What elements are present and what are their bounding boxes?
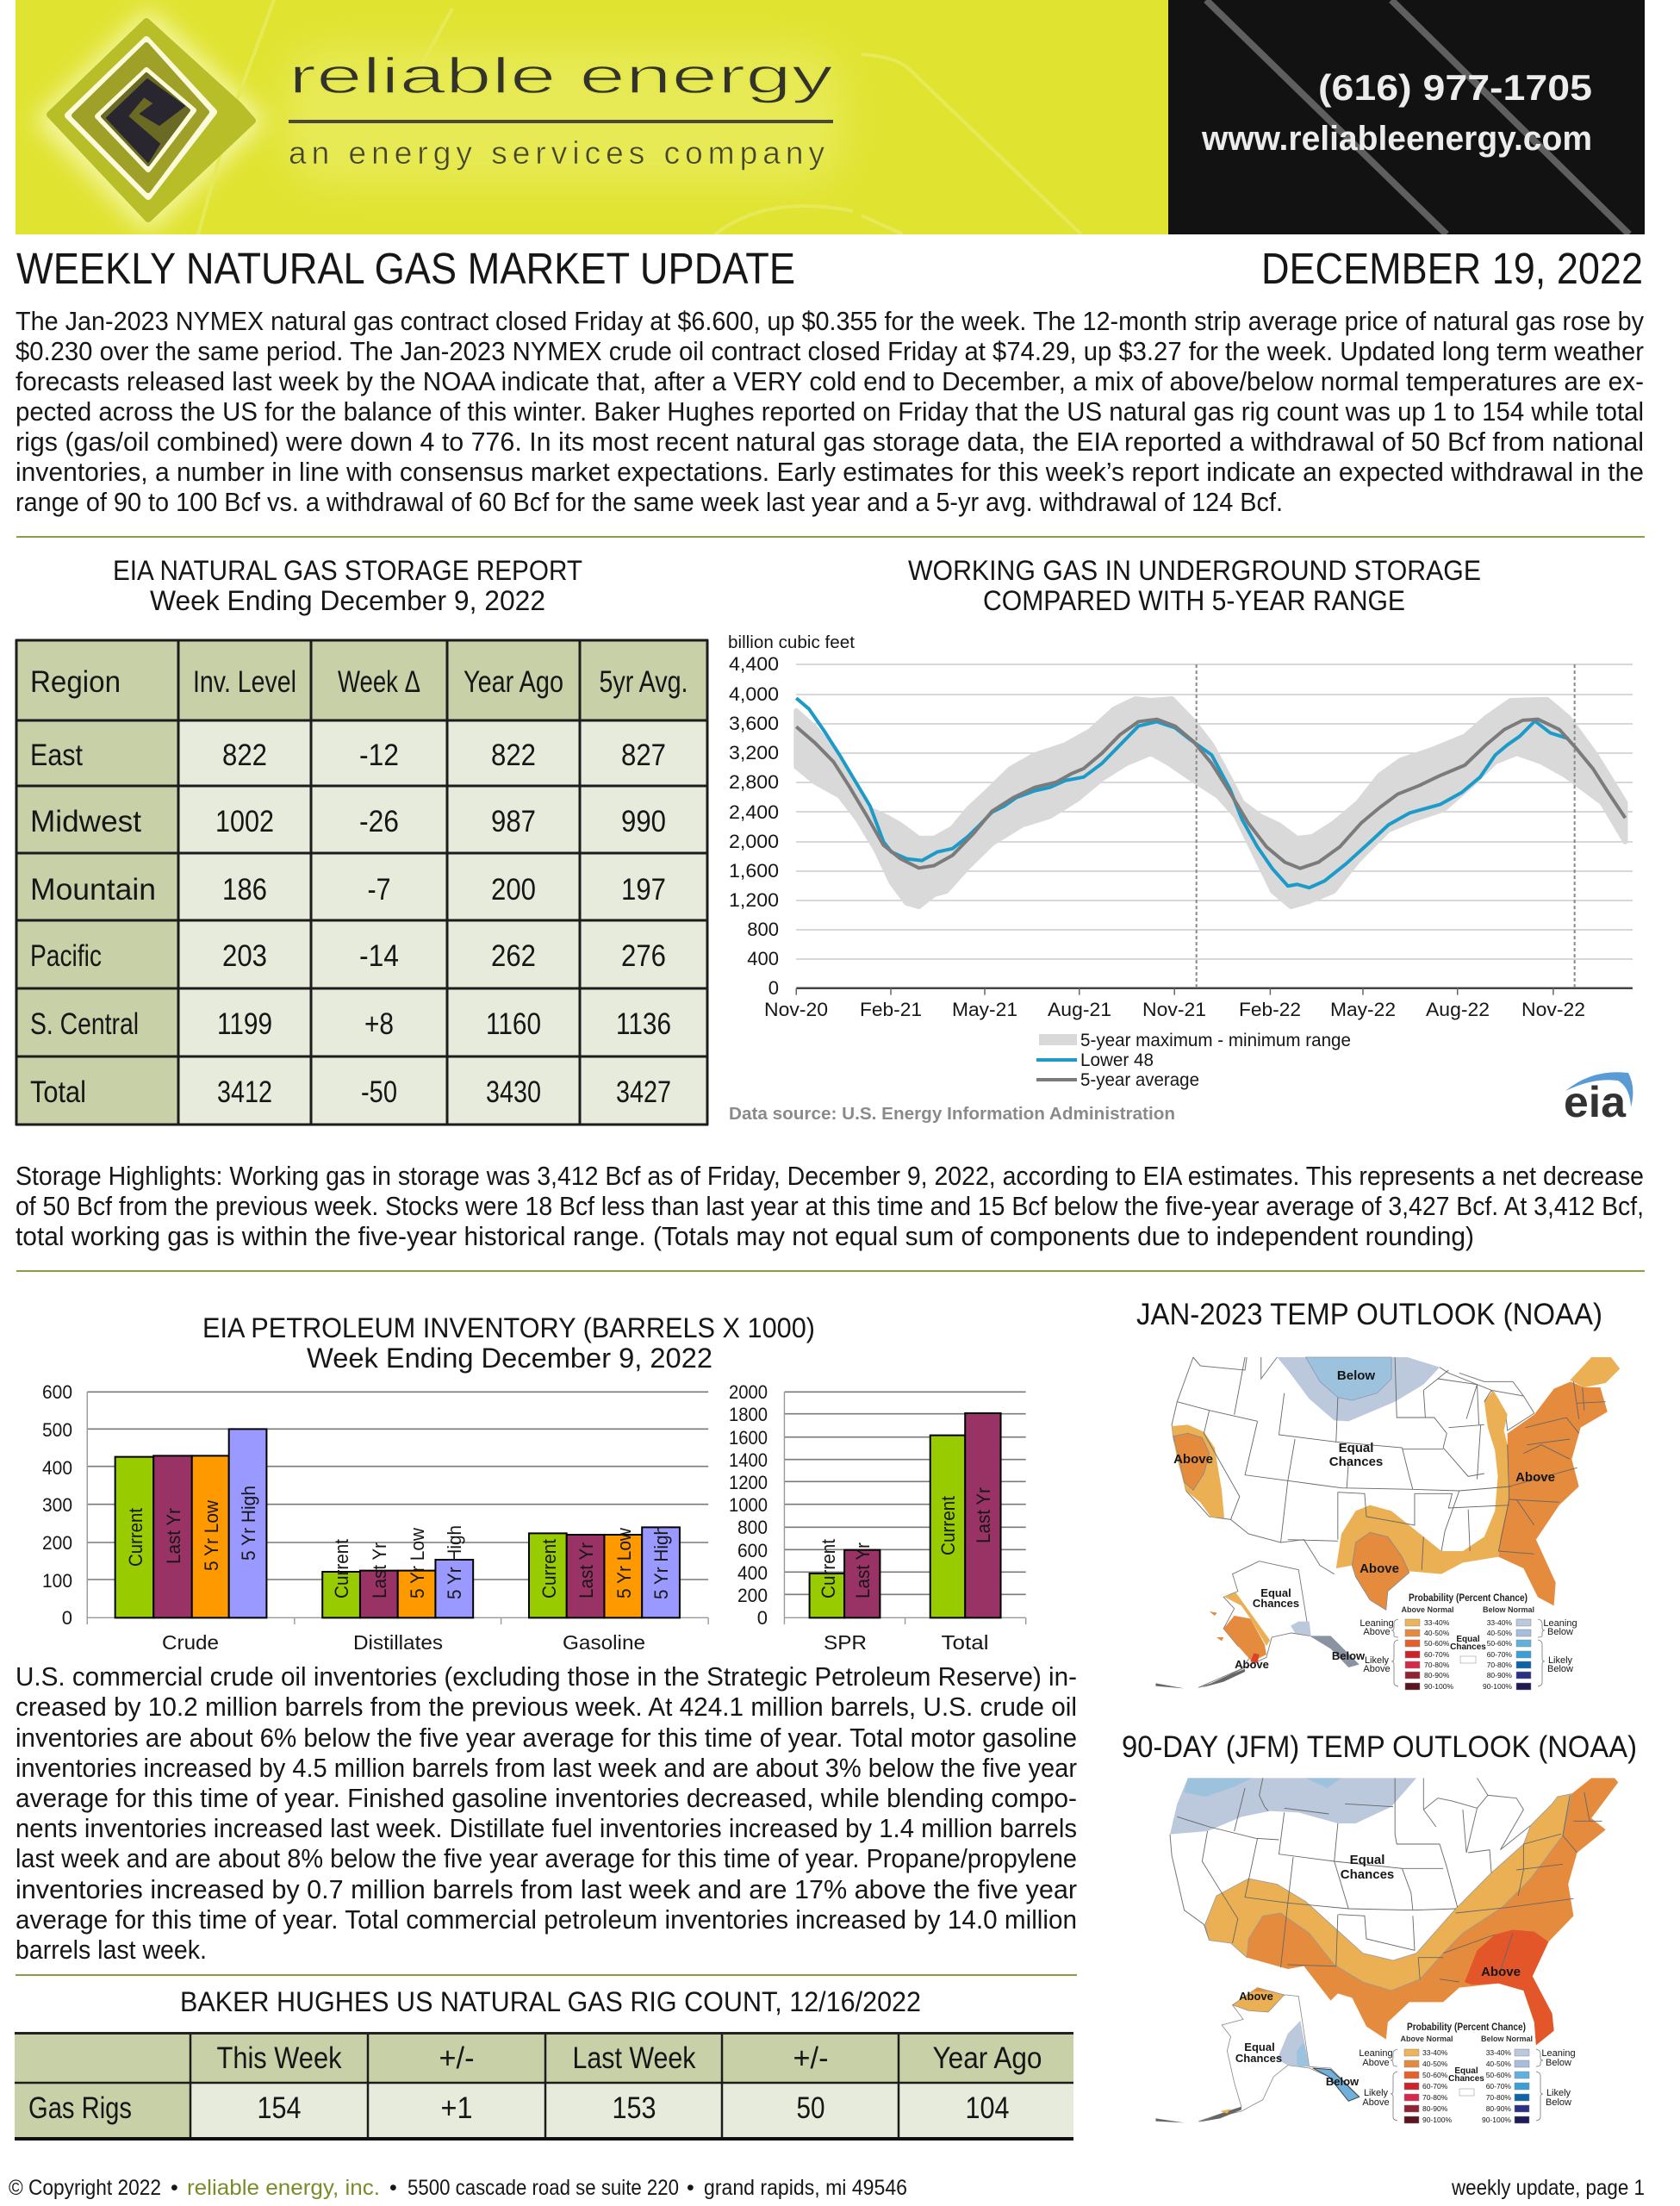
heading: storage report: Week Ending December 9, 2022 <box>150 585 545 616</box>
table header row <box>30 665 688 699</box>
Alaska <box>1198 1561 1310 1687</box>
map legend: Equal <box>1454 2066 1478 2076</box>
intro text block: rigs (gas/oil combined) were down 4 to 776. In its most recent natural gas storage data, the EIA reported a withdrawal of 50 Bcf from national <box>16 427 1644 457</box>
map legend: Likely <box>1365 1655 1390 1666</box>
map legend: 90-100% <box>1422 2116 1452 2124</box>
right axis labels: 1000 <box>729 1494 768 1516</box>
map labels: Below <box>1332 1649 1366 1662</box>
heading: petroleum inventory: Week Ending December 9, 2022 <box>307 1343 712 1374</box>
map legend: Leaning <box>1543 1618 1577 1629</box>
icon: eia logo: eia <box>1564 1078 1627 1126</box>
right axis labels: 1400 <box>729 1449 768 1471</box>
intro text block: range of 90 to 100 Bcf vs. a withdrawal of 60 Bcf for the same week last year and a 5-yr avg. withdrawal of 124 Bcf. <box>16 487 1283 517</box>
bar labels: Last Yr <box>852 1542 874 1598</box>
map legend: 80-90% <box>1424 1671 1450 1679</box>
chart: x-axis labels: Feb-22 <box>1239 999 1301 1020</box>
intro text block <box>16 306 1644 517</box>
row: Mountain: -7 <box>367 873 391 907</box>
above, east <box>1498 1381 1608 1605</box>
website: www.reliableenergy.com <box>1201 120 1592 158</box>
bar labels: Current <box>937 1496 959 1555</box>
line chart: working gas in storage <box>728 633 1633 1126</box>
left axis labels: 200 <box>42 1532 72 1554</box>
petroleum text block: nents inventories increased last week. Distillate fuel inventories increased by 1.4 million barrels <box>16 1813 1077 1843</box>
heading: storage report <box>113 555 582 616</box>
row: Total: -50 <box>361 1075 397 1109</box>
row: Pacific: -14 <box>359 939 399 973</box>
bar labels: Last Yr <box>576 1542 597 1598</box>
map legend: Leaning <box>1359 2048 1393 2059</box>
row: S. Central: 1160 <box>486 1007 541 1041</box>
footer: copyright and address: reliable energy, inc. <box>187 2176 380 2200</box>
left axis labels: 600 <box>42 1381 72 1403</box>
map legend: 90-100% <box>1482 2116 1511 2124</box>
chart: y-axis labels: 2,800 <box>729 771 779 793</box>
petroleum text block: inventories increased by 4.5 million barrels from last week and are about 3% below the five year <box>16 1753 1077 1783</box>
category labels: Gasoline <box>563 1631 645 1654</box>
row: East <box>30 738 666 772</box>
map legend: Probability (Percent Chance) <box>1409 1592 1528 1604</box>
heading: petroleum inventory: EIA PETROLEUM INVENTORY (BARRELS X 1000) <box>202 1312 815 1343</box>
leaning below <box>1170 1778 1416 1835</box>
row: Pacific: Pacific <box>30 939 102 973</box>
category labels: Crude <box>162 1631 219 1654</box>
map legend: 70-80% <box>1422 2093 1448 2102</box>
map labels: Equal <box>1260 1586 1291 1599</box>
row: S. Central <box>30 1007 671 1041</box>
footer: copyright and address <box>9 2176 907 2200</box>
map legend: 60-70% <box>1422 2082 1448 2091</box>
contact panel <box>1168 0 1645 234</box>
heading: petroleum inventory <box>202 1312 815 1374</box>
category labels: Distillates <box>353 1631 443 1654</box>
rig table header: +/- <box>439 2041 474 2075</box>
map shapes <box>1155 1778 1618 2122</box>
below, northern plains <box>1306 1357 1391 1400</box>
table header row: Week Δ <box>338 665 420 699</box>
chart: x-axis labels: Nov-21 <box>1142 999 1206 1020</box>
bar labels: Current <box>125 1508 146 1567</box>
header banner <box>16 0 1645 234</box>
map legend: Above Normal <box>1401 1605 1454 1614</box>
map labels: Equal <box>1244 2041 1275 2053</box>
map legend: 33-40% <box>1487 1618 1512 1627</box>
petroleum text block: inventories increased by 0.7 million barrels from last week and are 17% above the five year <box>16 1874 1077 1904</box>
heading: underground storage chart <box>908 555 1481 616</box>
leaning below <box>1277 1357 1440 1421</box>
map labels: Above <box>1515 1470 1555 1485</box>
row: Mountain: 186 <box>222 873 267 907</box>
row: Midwest <box>30 805 666 838</box>
map labels: Above <box>1173 1452 1213 1467</box>
below, northwest <box>1185 1778 1252 1797</box>
map legend: Chances <box>1450 1642 1486 1652</box>
map legend: Below <box>1546 2097 1571 2108</box>
table header row: Inv. Level <box>193 665 296 699</box>
map legend: 40-50% <box>1424 1629 1450 1637</box>
chart: y-axis labels <box>729 653 779 999</box>
left axis labels: 400 <box>42 1457 72 1479</box>
chart: range and series <box>796 664 1633 995</box>
footer: copyright and address: grand rapids, mi 49546 <box>704 2176 907 2200</box>
above, southeast core <box>1465 1929 1554 2045</box>
footer: copyright and address: 5500 cascade road se suite 220 <box>408 2176 679 2200</box>
chart: y-axis labels: 4,000 <box>729 683 779 705</box>
row: Total: 3430 <box>486 1075 541 1109</box>
rig table header: Last Week <box>572 2041 696 2075</box>
bar labels: 5 Yr High <box>444 1525 465 1599</box>
chart: y-axis labels: 400 <box>747 948 779 969</box>
map labels <box>1235 1853 1521 2088</box>
heading: January outlook: JAN-2023 TEMP OUTLOOK (NOAA) <box>1136 1298 1602 1331</box>
footer: copyright and address: © Copyright 2022 <box>9 2176 161 2200</box>
logo: divider rule <box>289 120 833 123</box>
row: Midwest: 1002 <box>215 805 274 838</box>
row: S. Central: S. Central <box>30 1007 139 1041</box>
chart: x-axis labels: Aug-22 <box>1426 999 1490 1020</box>
petroleum text block <box>16 1661 1077 1965</box>
row: Mountain: 197 <box>621 873 666 907</box>
map legend: Probability (Percent Chance) <box>1407 2021 1526 2033</box>
map legend: 33-40% <box>1422 2048 1448 2057</box>
state lines <box>1177 1778 1602 1982</box>
row: Mountain: Mountain <box>30 873 156 907</box>
row: Pacific: 262 <box>491 939 536 973</box>
map: 90-day temperature outlook <box>1155 1778 1618 2124</box>
rig table row: 104 <box>965 2091 1010 2125</box>
footer: copyright and address: • <box>687 2176 694 2200</box>
row: Total: Total <box>30 1075 86 1109</box>
map legend: Below <box>1546 2058 1571 2068</box>
footer: page number: weekly update, page 1 <box>1451 2176 1645 2200</box>
table header row: Year Ago <box>464 665 563 699</box>
map legend: 60-70% <box>1487 1650 1512 1659</box>
rig table row <box>28 2091 1010 2125</box>
map legend: Below Normal <box>1481 2035 1533 2043</box>
map legend: 70-80% <box>1487 1661 1512 1669</box>
above, west <box>1173 1433 1210 1490</box>
petroleum text block: last week and are about 8% below the five year average for this time of year. Propane/propylene <box>16 1843 1077 1873</box>
map: January temperature outlook <box>1155 1357 1620 1691</box>
storage highlights text: total working gas is within the five-year historical range. (Totals may not equal sum of components due to independent rounding) <box>16 1221 1474 1251</box>
bar labels: Last Yr <box>369 1542 390 1598</box>
chart: y-axis labels: 800 <box>747 919 779 940</box>
bar labels: 5 Yr Low <box>407 1528 428 1598</box>
rig table row: 50 <box>796 2091 825 2125</box>
map legend: 60-70% <box>1424 1650 1450 1659</box>
chart: x-axis labels: Feb-21 <box>860 999 922 1020</box>
map legend: Likely <box>1546 2088 1571 2098</box>
bar labels: Current <box>331 1539 352 1598</box>
map legend: 90-100% <box>1483 1682 1512 1691</box>
heading: underground storage chart: COMPARED WITH 5-YEAR RANGE <box>983 585 1405 616</box>
bar chart: petroleum inventory <box>42 1381 1026 1654</box>
leaning above, west <box>1172 1424 1224 1518</box>
bar labels: Last Yr <box>973 1487 994 1543</box>
chart: y-axis labels: 3,200 <box>729 742 779 763</box>
chart: x-axis labels: Nov-20 <box>764 999 828 1020</box>
map legend: 80-90% <box>1486 2104 1511 2113</box>
map legend: 33-40% <box>1424 1618 1450 1627</box>
map labels <box>1173 1368 1555 1671</box>
map labels: Chances <box>1235 2052 1282 2065</box>
rig count table <box>15 2032 1073 2141</box>
table header row: Region <box>30 665 121 699</box>
footer: copyright and address: • <box>389 2176 397 2200</box>
chart: data source: Data source: U.S. Energy Information Administration <box>729 1105 1175 1124</box>
bar labels: Last Yr <box>163 1508 184 1564</box>
map legend: 80-90% <box>1487 1671 1512 1679</box>
rig table header: This Week <box>217 2041 342 2075</box>
chart: x-axis labels <box>764 999 1585 1020</box>
map legend: Above Normal <box>1400 2035 1453 2043</box>
chart frame and bars <box>87 1392 1026 1624</box>
row: Pacific <box>30 939 666 973</box>
left axis labels: 500 <box>42 1419 72 1441</box>
petroleum text block: barrels last week. <box>16 1935 207 1965</box>
chart: y-axis title: billion cubic feet <box>728 633 855 652</box>
banner: yellow logo panel <box>16 0 1168 234</box>
rig table row: 154 <box>257 2091 302 2125</box>
map legend: Above <box>1362 2058 1390 2068</box>
row: Mountain: 200 <box>491 873 536 907</box>
rig table row: 153 <box>612 2091 656 2125</box>
map labels: Above <box>1235 1658 1269 1671</box>
bar labels <box>125 1486 994 1599</box>
map labels: Chances <box>1329 1455 1383 1469</box>
row: Pacific: 276 <box>621 939 666 973</box>
5-year range band <box>796 699 1625 907</box>
map legend: Above <box>1363 1627 1391 1637</box>
map labels: Above <box>1360 1561 1399 1576</box>
category labels: SPR <box>824 1631 867 1654</box>
map legend: Leaning <box>1541 2048 1576 2059</box>
row: Total: 3412 <box>217 1075 272 1109</box>
row: S. Central: 1136 <box>616 1007 671 1041</box>
chart: legend: 5-year maximum - minimum range <box>1080 1031 1351 1050</box>
map labels: Equal <box>1339 1441 1373 1455</box>
right axis labels: 2000 <box>729 1381 768 1403</box>
map legend: Leaning <box>1360 1618 1394 1629</box>
leaning above, south and midwest <box>1336 1390 1509 1583</box>
bar labels: 5 Yr High <box>238 1486 259 1561</box>
row: Mountain <box>30 873 666 907</box>
map legend: Above <box>1362 2097 1390 2108</box>
map legend: 80-90% <box>1422 2104 1448 2113</box>
row: East: East <box>30 738 83 772</box>
left axis labels: 100 <box>42 1570 72 1592</box>
map legend: Likely <box>1548 1655 1573 1666</box>
bar labels: Current <box>818 1539 839 1598</box>
map legend: Below Normal <box>1483 1605 1534 1614</box>
chart: legend: 5-year average <box>1080 1070 1199 1090</box>
row: S. Central: 1199 <box>217 1007 272 1041</box>
map legend: 33-40% <box>1486 2048 1511 2057</box>
Alaska <box>1198 1995 1360 2122</box>
petroleum text block: U.S. commercial crude oil inventories (excluding those in the Strategic Petroleum Reserve) in- <box>16 1661 1077 1692</box>
right axis labels: 400 <box>737 1562 768 1584</box>
bar labels: Current <box>538 1539 560 1598</box>
map legend: 60-70% <box>1486 2082 1511 2091</box>
chart: y-axis labels: 2,000 <box>729 831 779 852</box>
rig table header <box>217 2041 1042 2075</box>
right axis labels <box>729 1381 768 1629</box>
map labels: Chances <box>1253 1597 1299 1610</box>
category labels <box>162 1631 989 1654</box>
left axis labels <box>42 1381 72 1629</box>
heading: storage report: EIA NATURAL GAS STORAGE REPORT <box>113 555 582 586</box>
row: Total <box>30 1075 671 1109</box>
map labels: Equal <box>1350 1853 1384 1867</box>
row: Midwest: 987 <box>491 805 536 838</box>
left axis labels: 0 <box>62 1607 72 1629</box>
map labels: Above <box>1481 1965 1521 1979</box>
phone number: (616) 977-1705 <box>1318 67 1592 108</box>
rig table row: +1 <box>441 2091 472 2125</box>
heading: underground storage chart: WORKING GAS IN UNDERGROUND STORAGE <box>908 555 1481 586</box>
chart: x-axis labels: Nov-22 <box>1521 999 1585 1020</box>
map legend: 70-80% <box>1424 1661 1450 1669</box>
chart: y-axis labels: 1,200 <box>729 889 779 911</box>
right axis labels: 200 <box>737 1585 768 1606</box>
5-year average line <box>796 720 1625 869</box>
map legend <box>1359 2021 1576 2124</box>
chart: legend: Lower 48 <box>1080 1050 1154 1070</box>
row: Total: 3427 <box>616 1075 671 1109</box>
map legend: Equal <box>1456 1635 1480 1644</box>
bar labels: 5 Yr Low <box>613 1528 635 1598</box>
row: S. Central: +8 <box>364 1007 394 1041</box>
map labels: Above <box>1239 1990 1273 2003</box>
row: Midwest: -26 <box>359 805 399 838</box>
logo: tagline: an energy services company <box>289 135 825 171</box>
map legend: Above <box>1363 1664 1391 1674</box>
map legend <box>1360 1592 1577 1691</box>
logo: company name: reliable energy <box>289 48 833 104</box>
chart: x-axis labels: Aug-21 <box>1048 999 1111 1020</box>
rig table row: Gas Rigs <box>28 2091 132 2125</box>
right axis labels: 1800 <box>729 1404 768 1425</box>
table header row: 5yr Avg. <box>600 665 688 699</box>
right axis labels: 1600 <box>729 1427 768 1449</box>
state lines <box>1177 1357 1606 1570</box>
storage table <box>16 639 708 1125</box>
map legend: Below <box>1547 1627 1573 1637</box>
rig table header: Year Ago <box>932 2041 1042 2075</box>
heading: rig count: BAKER HUGHES US NATURAL GAS RIG COUNT, 12/16/2022 <box>180 1986 921 2017</box>
intro text block: forecasts released last week by the NOAA indicate that, after a VERY cold end to December, a mix of above/below normal temperatures are ex- <box>16 366 1644 396</box>
petroleum text block: average for this time of year. Finished gasoline inventories decreased, while blending compo- <box>16 1783 1077 1813</box>
right axis labels: 1200 <box>729 1472 768 1493</box>
chart: y-axis labels: 1,600 <box>729 860 779 882</box>
above, south and east <box>1247 1778 1618 2045</box>
Lower 48 line <box>796 698 1569 888</box>
map legend: Below <box>1547 1664 1573 1674</box>
map legend: 50-60% <box>1424 1639 1450 1648</box>
heading: 90-day outlook: 90-DAY (JFM) TEMP OUTLOOK (NOAA) <box>1122 1730 1637 1764</box>
petroleum text block: average for this time of year. Total commercial petroleum inventories increased by 14.0 million <box>16 1904 1077 1935</box>
row: Pacific: 203 <box>222 939 267 973</box>
category labels: Total <box>941 1631 989 1654</box>
map legend: 40-50% <box>1486 2060 1511 2068</box>
map legend: 50-60% <box>1486 2071 1511 2079</box>
petroleum text block: inventories are about 6% below the five year average for this time of year. Total motor gasoline <box>16 1723 1077 1753</box>
row: East: 822 <box>491 738 536 772</box>
leaning above, new england <box>1570 1357 1620 1387</box>
row: East: 827 <box>621 738 666 772</box>
map legend: 50-60% <box>1422 2071 1448 2079</box>
logo: diamond mark <box>50 22 252 219</box>
title: WEEKLY NATURAL GAS MARKET UPDATE <box>16 244 795 293</box>
map shapes <box>1155 1357 1620 1688</box>
below, north central <box>1306 1778 1341 1788</box>
map labels: Below <box>1326 2075 1360 2088</box>
right axis labels: 600 <box>737 1540 768 1561</box>
left axis labels: 300 <box>42 1494 72 1516</box>
right axis labels: 0 <box>757 1607 768 1629</box>
rig table header: +/- <box>793 2041 829 2075</box>
row: Midwest: 990 <box>621 805 666 838</box>
footer: copyright and address: • <box>171 2176 178 2200</box>
map labels: Chances <box>1341 1867 1394 1882</box>
map legend: Chances <box>1448 2074 1484 2084</box>
bar labels: 5 Yr High <box>650 1525 672 1599</box>
right axis labels: 800 <box>737 1517 768 1538</box>
map legend: 70-80% <box>1486 2093 1511 2102</box>
chart: y-axis labels: 4,400 <box>729 653 779 675</box>
row: East: 822 <box>222 738 267 772</box>
intro text block: inventories, a number in line with consensus market expectations. Early estimates for this week’s report indicate an expected withdrawal in the <box>16 457 1644 487</box>
map legend: 40-50% <box>1422 2060 1448 2068</box>
storage highlights text <box>16 1161 1644 1251</box>
above, Texas <box>1352 1532 1409 1610</box>
chart: y-axis labels: 3,600 <box>729 713 779 734</box>
chart: x-axis labels: May-21 <box>952 999 1017 1020</box>
row: Midwest: Midwest <box>30 805 141 838</box>
chart: x-axis labels: May-22 <box>1330 999 1396 1020</box>
petroleum text block: creased by 10.2 million barrels from the previous week. At 424.1 million barrels, U.S. crude oil <box>16 1692 1077 1722</box>
map legend: 40-50% <box>1487 1629 1512 1637</box>
map legend: Likely <box>1364 2088 1389 2098</box>
map legend: 90-100% <box>1424 1682 1453 1691</box>
chart: y-axis labels: 0 <box>768 977 779 999</box>
map labels: Below <box>1337 1368 1375 1383</box>
chart: y-axis labels: 2,400 <box>729 801 779 823</box>
bar labels: 5 Yr Low <box>201 1500 222 1571</box>
map legend: 50-60% <box>1487 1639 1512 1648</box>
leaning above band <box>1205 1794 1571 1991</box>
row: East: -12 <box>359 738 399 772</box>
chart: legend <box>1036 1031 1351 1090</box>
